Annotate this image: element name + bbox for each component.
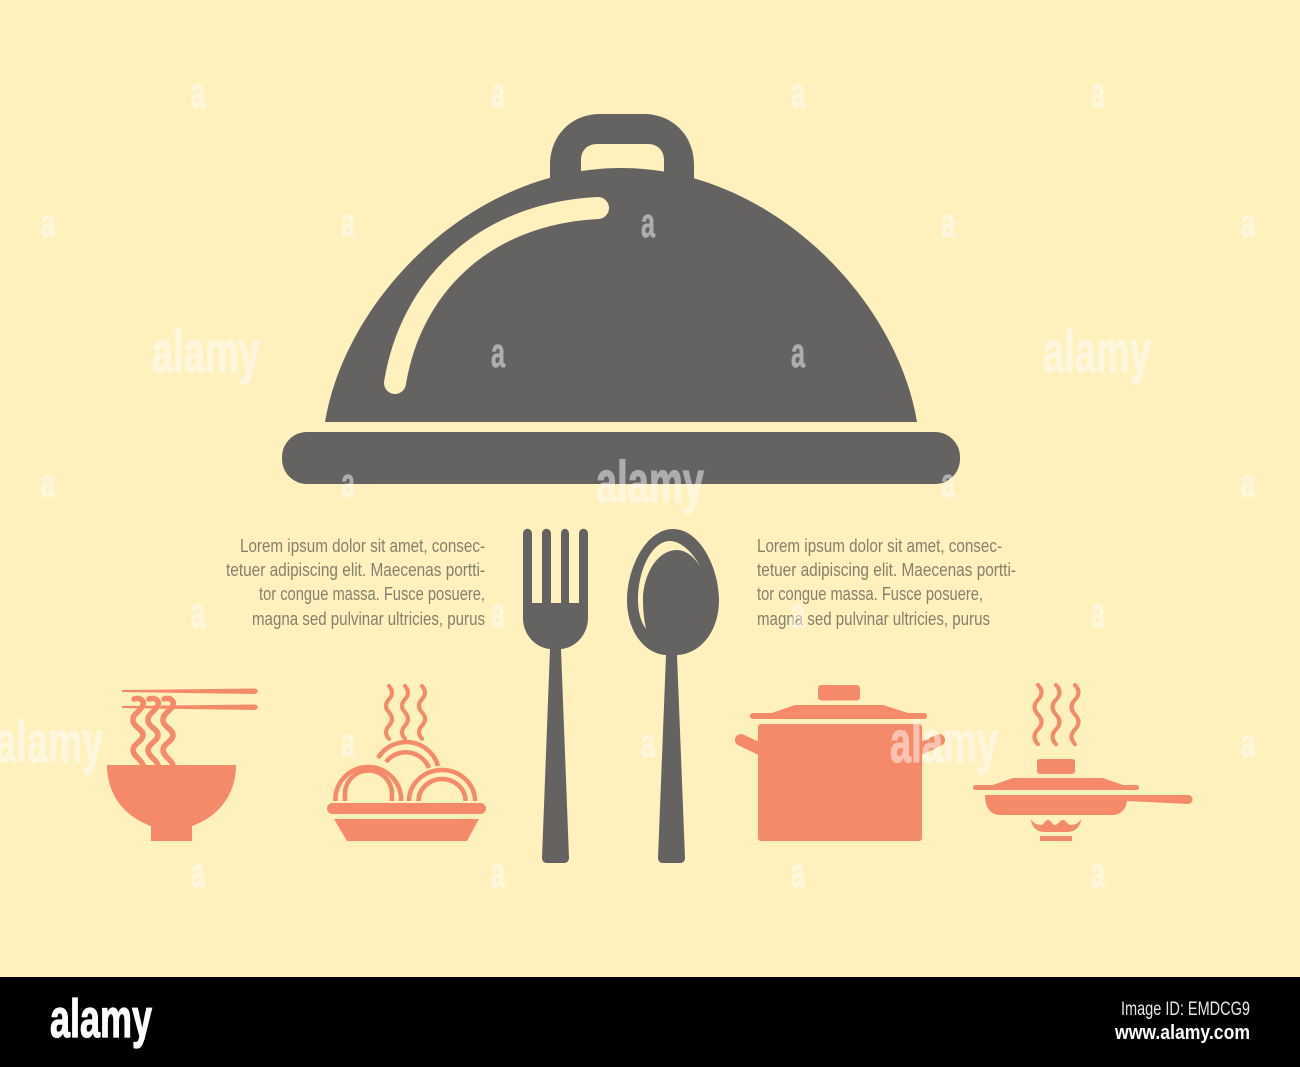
watermarks: a: [1241, 459, 1255, 506]
text block: right: tetuer adipiscing elit. Maecenas portti-: [757, 560, 1016, 580]
spoon body: [627, 529, 719, 863]
pot body: [758, 724, 922, 841]
watermarks: a: [1091, 589, 1105, 636]
pot handles: [741, 740, 939, 750]
pan with handle: [985, 795, 1192, 815]
icon: stock pot: [741, 685, 939, 841]
dome highlight: [395, 208, 598, 383]
watermarks: a: [341, 199, 355, 246]
watermarks: a: [791, 849, 805, 896]
watermarks: a: [41, 199, 55, 246]
text block: left: [226, 536, 485, 629]
footer band: [0, 977, 1300, 1067]
steam: [1034, 685, 1078, 744]
text block: right: Lorem ipsum dolor sit amet, consec-: [757, 536, 1002, 556]
pot lid knob: [818, 685, 860, 700]
cloche dome: [325, 168, 917, 422]
steam: [386, 686, 425, 739]
watermarks: a: [341, 719, 355, 766]
watermarks: a: [1091, 69, 1105, 116]
watermarks: a: [491, 69, 505, 116]
pot lid: [750, 705, 927, 719]
icon: spoon: [627, 529, 719, 863]
icon: fork: [523, 529, 588, 863]
burner flame: [1031, 819, 1081, 832]
watermarks: [0, 69, 1255, 896]
watermarks: a: [791, 69, 805, 116]
text block: left: tor congue massa. Fusce posuere,: [259, 584, 485, 604]
watermarks: a: [491, 589, 505, 636]
text block: right: magna sed pulvinar ultricies, purus: [757, 609, 990, 629]
watermarks: a: [791, 329, 805, 376]
plate rim: [327, 803, 486, 814]
text block: left: Lorem ipsum dolor sit amet, consec-: [240, 536, 485, 556]
serving tray: [282, 432, 960, 484]
watermarks: alamy: [1043, 320, 1151, 385]
chopsticks: [122, 688, 258, 710]
icon: frying pan on burner: [973, 685, 1192, 841]
watermarks: a: [191, 589, 205, 636]
watermarks: a: [1091, 849, 1105, 896]
watermarks: a: [191, 849, 205, 896]
cloche handle: [550, 114, 694, 190]
watermarks: a: [1241, 719, 1255, 766]
spoon highlight: [638, 541, 700, 629]
text block: right: tor congue massa. Fusce posuere,: [757, 584, 983, 604]
watermarks: a: [641, 719, 655, 766]
plate base: [334, 819, 479, 841]
watermarks: a: [341, 459, 355, 506]
text block: left: magna sed pulvinar ultricies, purus: [252, 609, 485, 629]
watermarks: a: [941, 199, 955, 246]
watermarks: a: [791, 589, 805, 636]
watermarks: alamy: [152, 320, 260, 385]
pan lid knob: [1037, 759, 1075, 774]
pasta mounds: [336, 742, 475, 801]
watermarks: a: [191, 69, 205, 116]
noodles: [133, 698, 173, 765]
website: www.alamy.com: [1114, 1022, 1250, 1044]
icon: serving cloche: [282, 114, 960, 484]
watermarks: alamy: [596, 450, 704, 515]
watermarks: a: [641, 199, 655, 246]
icon: spaghetti plate: [327, 686, 486, 841]
watermarks: a: [491, 329, 505, 376]
bowl: [107, 765, 236, 841]
icon: noodle bowl: [107, 688, 258, 841]
watermarks: a: [1241, 199, 1255, 246]
watermarks: alamy: [890, 710, 998, 775]
pan lid: [973, 778, 1139, 790]
watermarks: a: [491, 849, 505, 896]
burner base: [1040, 836, 1072, 841]
text block: left: tetuer adipiscing elit. Maecenas portti-: [226, 560, 485, 580]
watermarks: a: [941, 459, 955, 506]
footer logo: alamy: [50, 989, 152, 1049]
watermarks: a: [41, 459, 55, 506]
text block: right: [757, 536, 1016, 629]
image id: Image ID: EMDCG9: [1121, 999, 1250, 1020]
